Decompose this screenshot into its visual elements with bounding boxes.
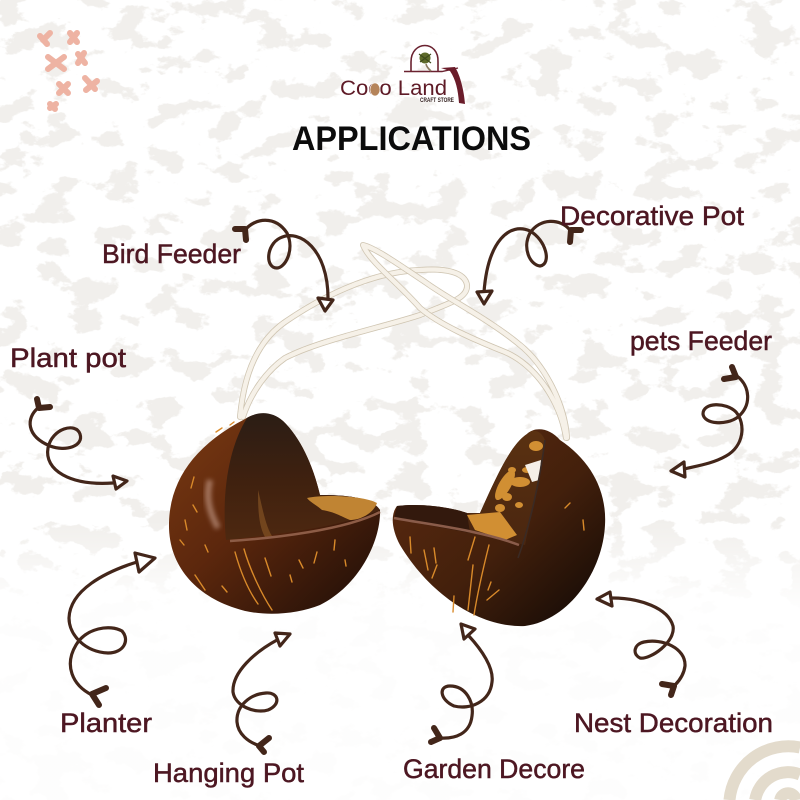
label: planter: Planter xyxy=(60,708,152,738)
logo: Coco Land Craft Store xyxy=(340,46,465,104)
left shell body xyxy=(169,414,380,614)
label: decorative pot: Decorative Pot xyxy=(560,201,745,231)
left shell sheen xyxy=(208,480,218,528)
title: APPLICATIONS xyxy=(292,120,531,158)
arrow: pets feeder xyxy=(671,367,748,477)
label: garden decore: Garden Decore xyxy=(403,754,585,784)
arrow: plant pot xyxy=(30,399,127,489)
left coconut bowl xyxy=(169,413,380,614)
white lower area wash xyxy=(0,520,800,800)
logo arch and palm xyxy=(404,46,458,72)
left shell rim highlight xyxy=(230,512,380,541)
right bowl interior xyxy=(394,505,470,533)
right shell scratches xyxy=(410,503,584,615)
arrow: garden decore xyxy=(431,624,492,742)
logo coconut xyxy=(370,83,380,96)
arrow: nest decoration xyxy=(597,592,685,695)
right shell rim highlight xyxy=(394,518,519,545)
right shell rope knot xyxy=(525,460,541,482)
decorative corner rings xyxy=(730,746,800,800)
logo wordmark: Coco Land xyxy=(340,77,447,100)
arrow: decorative pot xyxy=(477,221,581,304)
label: hanging pot: Hanging Pot xyxy=(153,758,305,788)
left shell dark interior xyxy=(225,413,380,540)
right shell inner wall xyxy=(467,431,545,545)
label: nest decoration: Nest Decoration xyxy=(574,708,773,738)
right shell fibre patches xyxy=(467,441,543,540)
right shell seam xyxy=(518,440,545,558)
decorative pink crosses xyxy=(40,33,97,109)
hanging rope xyxy=(240,245,567,438)
left shell bowl interior fibre xyxy=(307,496,377,520)
right coconut bowl xyxy=(393,429,605,626)
label: bird feeder: Bird Feeder xyxy=(102,239,241,269)
left shell scratches xyxy=(180,422,346,610)
arrow: hanging pot xyxy=(233,633,290,752)
label: plant pot: Plant pot xyxy=(10,343,127,373)
arrow: planter xyxy=(69,553,155,705)
label: pets feeder: pets Feeder xyxy=(630,326,772,356)
logo tagline: CRAFT STORE xyxy=(420,98,454,104)
arrow: bird feeder xyxy=(235,220,333,311)
right shell body xyxy=(393,429,605,626)
logo swoosh xyxy=(441,67,465,104)
